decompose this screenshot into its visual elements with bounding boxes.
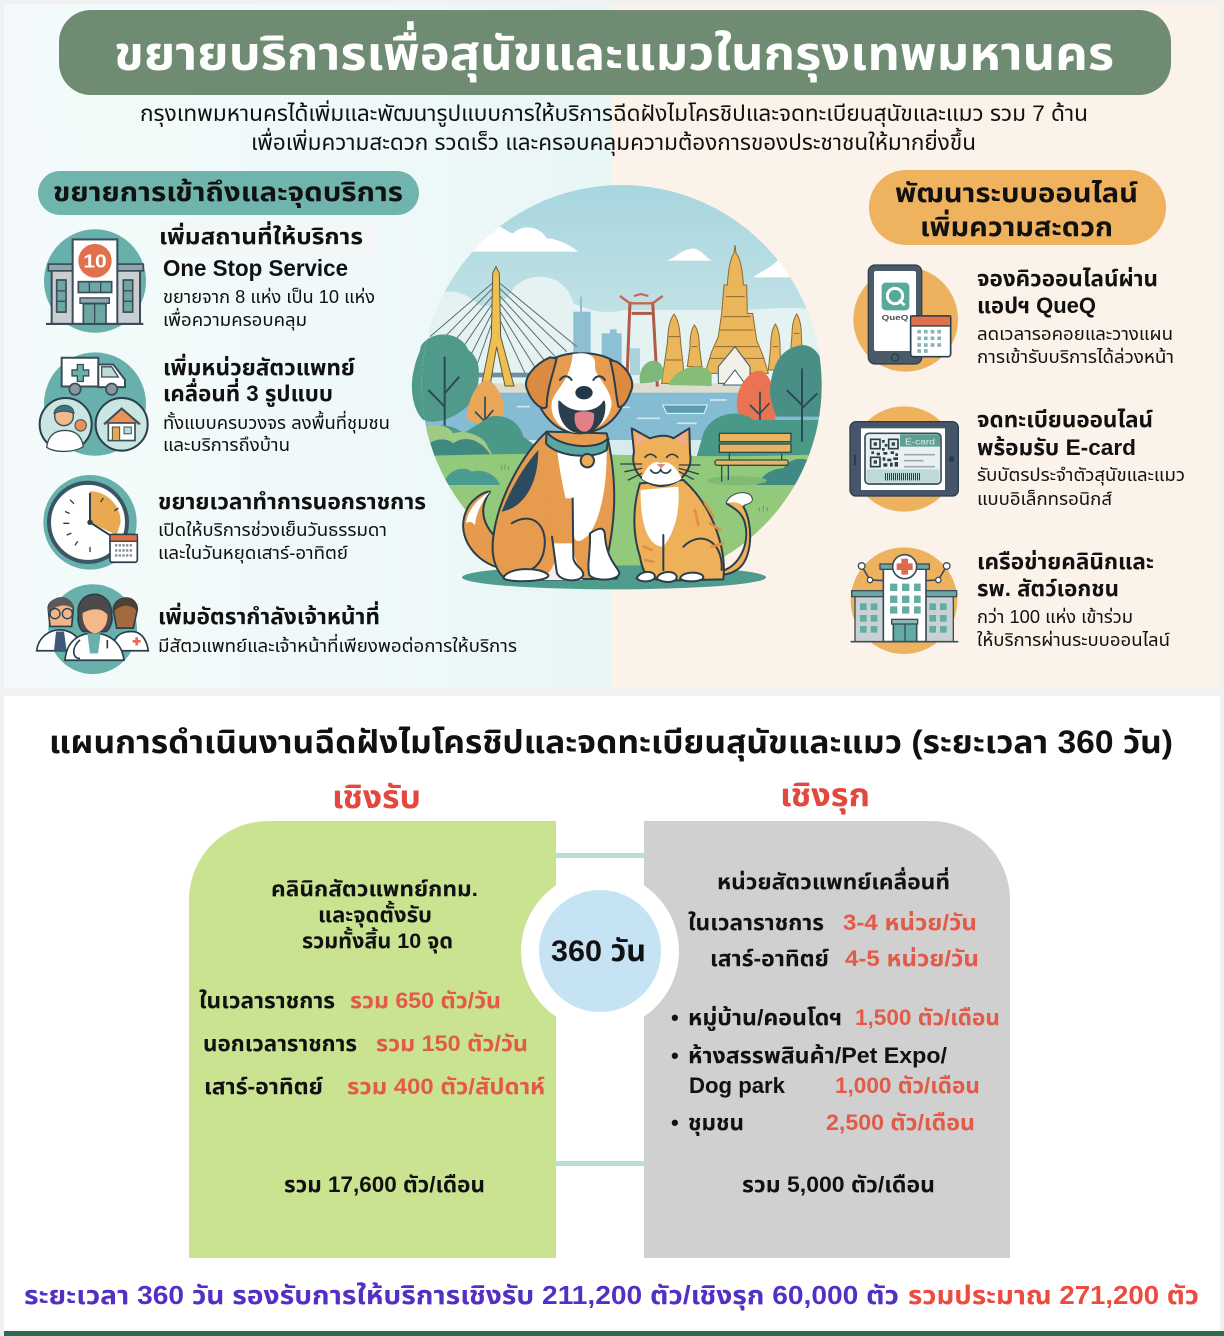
panel: proactive gray: รวม 5,000 ตัว/เดือน [742,1172,935,1197]
summary line [24,1280,1199,1311]
panel: reactive green: นอกเวลาราชการ [203,1031,357,1056]
text: mobile vet units: ทั้งแบบครบวงจร ลงพื้นที่ชุมชน [163,410,390,434]
ground shadow [462,565,766,589]
boat [663,405,707,413]
text: online registration: จดทะเบียนออนไลน์ [977,407,1153,432]
badge: 360 days [521,872,679,1030]
panel: proactive gray: 1,500 ตัว/เดือน [855,1005,1000,1030]
panel: bottom plan section background [4,696,1220,1332]
panel: proactive gray: Dog park [689,1073,786,1098]
text: private clinic network [977,549,1170,650]
temple [662,245,802,383]
footer strip [4,1331,1224,1336]
text: extended hours: และในวันหยุดเสาร์-อาทิตย์ [158,543,348,564]
panel: reactive green: และจุดตั้งรับ [318,901,432,928]
panel: proactive gray: 4-5 หน่วย/วัน [845,946,979,971]
panel: proactive gray: เสาร์-อาทิตย์ [710,946,829,971]
heading: right section pill: เพิ่มความสะดวก [920,210,1113,242]
panel: reactive green: รวมทั้งสิ้น 10 จุด [302,927,453,954]
title banner [59,10,1171,95]
text: mobile vet units: และบริการถึงบ้าน [163,435,290,455]
text: item highlight backing [158,220,380,256]
panel: proactive gray: หน่วยสัตวแพทย์เคลื่อนที่ [717,867,950,894]
icon: hospital network [851,547,958,654]
intro text [140,99,1088,156]
text: more staff: เพิ่มอัตรากำลังเจ้าหน้าที่ [158,601,380,629]
panel: proactive gray: 1,000 ตัว/เดือน [835,1073,980,1098]
text: online queue booking: การเข้ารับบริการได้ล่วงหน้า [977,347,1174,367]
text: more staff [158,601,517,656]
text: online registration: รับบัตรประจำตัวสุนัขและแมว [977,465,1185,486]
grass [434,454,809,566]
icon: QueQ phone app [853,265,958,372]
connector bars [556,853,644,1166]
cat [621,428,752,582]
title banner: ขยายบริการเพื่อสุนัขและแมวในกรุงเทพมหานคร [114,21,1114,82]
panel: reactive green: รวม 17,600 ตัว/เดือน [284,1172,485,1197]
bridge [430,280,577,377]
text: private clinic network: เครือข่ายคลินิกและ [977,549,1154,574]
text: private clinic network: รพ. สัตว์เอกชน [977,576,1119,601]
text: online queue booking: ลดเวลารอคอยและวางแผน [977,324,1173,344]
panel: proactive gray [644,821,1010,1258]
panel: top section background [4,4,1220,688]
text: online registration: แบบอิเล็กทรอนิกส์ [977,489,1112,509]
illustration: dog and cat in Bangkok park [412,185,822,590]
text: online registration [977,407,1185,509]
panel: proactive gray: • [671,1110,679,1135]
panel: proactive gray: ในเวลาราชการ [688,910,824,935]
icon: e-card tablet [850,406,958,512]
icon: mobile vet unit [40,352,148,456]
text: online registration: พร้อมรับ E-card [977,435,1136,460]
panel: reactive green: รวม 150 ตัว/วัน [376,1031,528,1056]
panel: reactive green: ในเวลาราชการ [199,988,335,1013]
icon: staff team [37,584,148,674]
right trees [737,371,777,423]
text: more service locations: ขยายจาก 8 แห่ง เป็น 10 แห่ง [163,287,375,307]
text: extended hours: เปิดให้บริการช่วงเย็นวันธรรมดา [158,520,387,540]
icons: left column [37,229,148,674]
text: extended hours: ขยายเวลาทำการนอกราชการ [158,489,426,514]
panel: reactive green: คลินิกสัตวแพทย์กทม. [271,878,478,901]
heading: plan title: แผนการดำเนินงานฉีดฝังไมโครชิปและจดทะเบียนสุนัขและแมว (ระยะเวลา 360 วัน) [49,724,1173,761]
bench [715,433,791,482]
heading: right section pill: พัฒนาระบบออนไลน์ [895,178,1138,208]
panel: proactive gray: ชุมชน [688,1110,744,1136]
text: more service locations: One Stop Service [163,255,348,281]
text: private clinic network: กว่า 100 แห่ง เข้าร่วม [977,607,1133,627]
panel: proactive gray: 2,500 ตัว/เดือน [826,1110,975,1135]
panel: proactive gray: ห้างสรรพสินค้า/Pet Expo/ [688,1043,947,1068]
intro text: เพื่อเพิ่มความสะดวก รวดเร็ว และครอบคลุมความต้องการของประชาชนให้มากยิ่งขึ้น [251,127,976,156]
text: more service locations [159,221,375,331]
heading: right section pill [869,170,1166,245]
panel: proactive gray: • [671,1005,679,1030]
text: online queue booking [977,266,1174,367]
heading: proactive: เชิงรุก [780,777,870,814]
text: online queue booking: จองคิวออนไลน์ผ่าน [977,266,1158,291]
summary line: รวมประมาณ 271,200 ตัว [908,1280,1199,1310]
intro text: กรุงเทพมหานครได้เพิ่มและพัฒนารูปแบบการให้บริการฉีดฝังไมโครชิปและจดทะเบียนสุนัขและแมว รวม 7 ด้าน [140,99,1088,127]
text: more service locations: เพื่อความครอบคลุม [163,307,307,331]
text: extended hours [158,489,426,564]
panel: proactive gray: หมู่บ้าน/คอนโดฯ [688,1005,842,1031]
heading: reactive: เชิงรับ [332,779,421,815]
heading: left section pill [38,171,419,215]
panel: reactive green: รวม 400 ตัว/สัปดาห์ [347,1074,545,1099]
heading: left section pill: ขยายการเข้าถึงและจุดบริการ [53,177,403,208]
text: mobile vet units [163,353,390,455]
icon: QueQ phone app: QueQ [882,313,908,322]
panel: reactive green [189,821,556,1258]
text: mobile vet units: เคลื่อนที่ 3 รูปแบบ [163,378,333,407]
panel: proactive gray: 3-4 หน่วย/วัน [843,910,977,935]
icon: service building 10 [44,229,146,333]
icons: right column [850,265,958,654]
icon: clock and calendar [43,475,137,570]
giant swing [620,294,663,387]
icon: e-card tablet: E-card [905,438,935,447]
dog [463,353,632,581]
text: mobile vet units: เพิ่มหน่วยสัตวแพทย์ [163,353,355,380]
badge: 360 days: 360 วัน [551,935,646,968]
text: private clinic network: ให้บริการผ่านระบบออนไลน์ [977,630,1170,650]
text: more service locations: เพิ่มสถานที่ให้บริการ [159,221,363,249]
panel: reactive green: รวม 650 ตัว/วัน [350,988,501,1013]
summary line: ระยะเวลา 360 วัน รองรับการให้บริการเชิงรับ 211,200 ตัว/เชิงรุก 60,000 ตัว [24,1280,899,1311]
panel: proactive gray: • [671,1043,679,1068]
panel: reactive green: เสาร์-อาทิตย์ [204,1074,323,1099]
text: online queue booking: แอปฯ QueQ [977,293,1096,318]
text: more staff: มีสัตวแพทย์และเจ้าหน้าที่เพียงพอต่อการให้บริการ [158,633,517,656]
icon: service building 10: 10 [83,250,107,272]
left trees [422,334,479,422]
